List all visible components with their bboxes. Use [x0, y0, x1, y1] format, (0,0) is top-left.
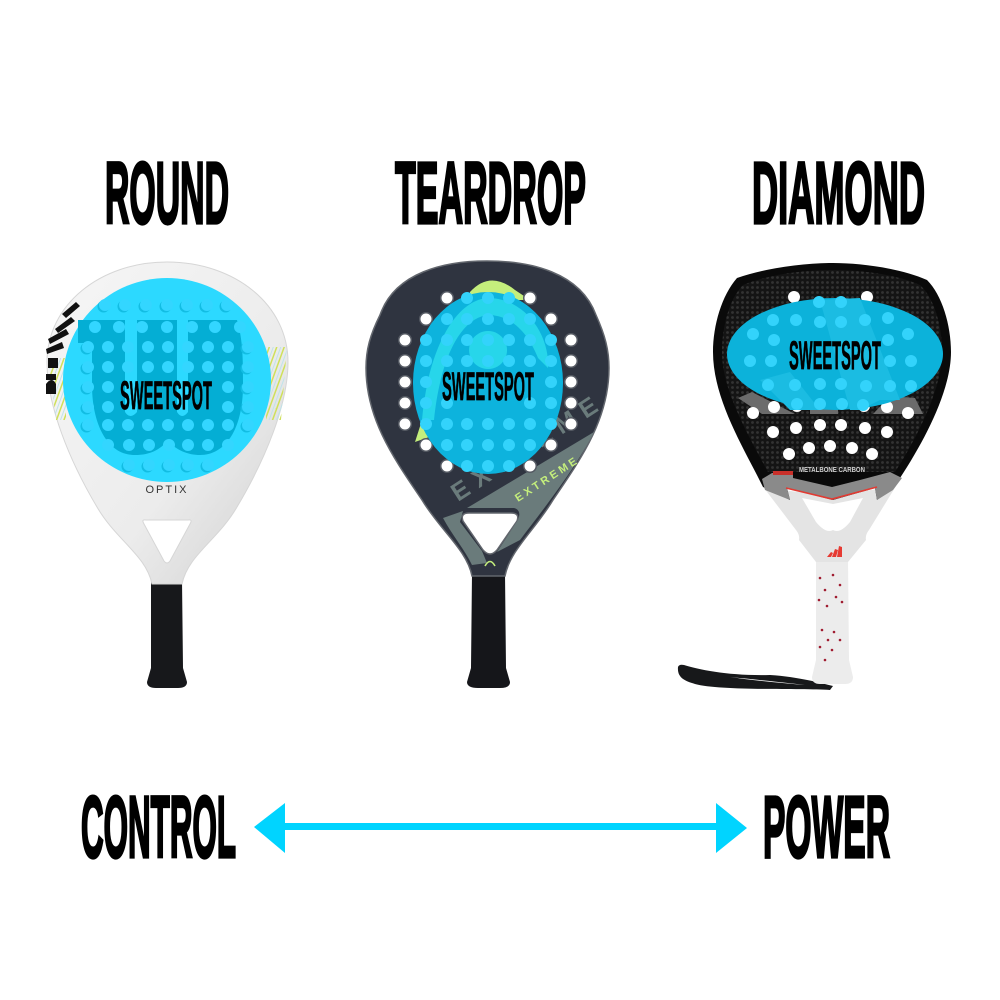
white throat [764, 486, 896, 562]
model name: METALBONE CARBON [799, 467, 865, 474]
lime logo accents [415, 280, 530, 442]
perforation dot shadows [86, 306, 246, 466]
red trim [786, 487, 877, 499]
diamond racket handle [812, 558, 853, 684]
side lettering marks [46, 302, 80, 394]
double-headed arrow [254, 803, 747, 853]
grey logo stripes [738, 392, 923, 414]
small extreme lettering: EXTREME [513, 454, 582, 505]
teardrop racket head [366, 261, 609, 576]
racket: diamond [678, 263, 951, 690]
racket: teardrop: SWEETSPOT [442, 365, 534, 409]
racket: round: SWEETSPOT [120, 374, 212, 418]
grip dots [819, 575, 842, 660]
diamond racket head [713, 263, 951, 500]
perforation dots [88, 305, 248, 465]
grey-green band [443, 432, 594, 565]
sweetspot zone [63, 278, 271, 482]
neck logo [485, 562, 495, 566]
text: CONTROL [81, 779, 236, 876]
sweetspot dots [426, 298, 551, 466]
racket: round [46, 262, 288, 688]
racket: teardrop [366, 261, 610, 688]
hole rings [405, 298, 571, 466]
round racket head [47, 262, 288, 584]
head logo arc [422, 298, 548, 420]
wilson W logo [78, 320, 243, 455]
sweetspot zone [413, 292, 563, 474]
wrist strap [678, 665, 833, 690]
adidas logo [827, 546, 842, 557]
grey lower band [762, 472, 902, 500]
red tag [773, 471, 793, 475]
large extreme lettering: EXTREME [446, 387, 610, 507]
racket holes [405, 298, 571, 466]
text: TEARDROP [395, 145, 586, 242]
side stripes [48, 347, 287, 420]
sweetspot dots [750, 302, 911, 405]
round racket handle [147, 580, 187, 688]
teardrop racket handle [467, 573, 510, 688]
racket holes [753, 297, 908, 454]
sweetspot zone [727, 298, 943, 410]
logo stripes over sweetspot [760, 298, 900, 410]
text: ROUND [105, 145, 229, 242]
brand name: optix: OPTIX [145, 484, 189, 496]
textured face [722, 270, 942, 472]
